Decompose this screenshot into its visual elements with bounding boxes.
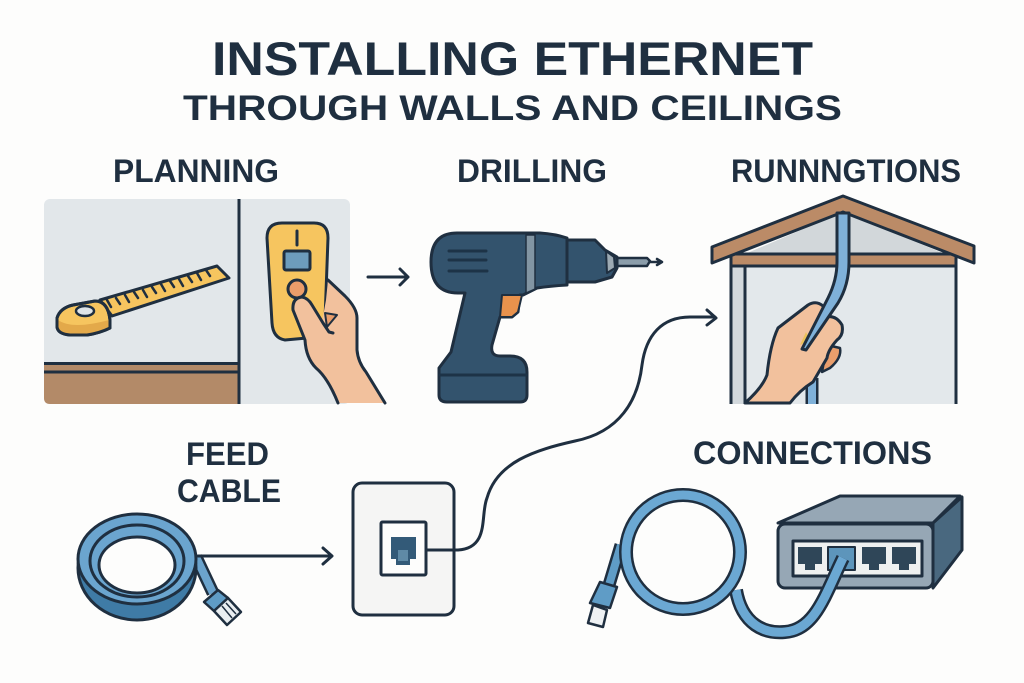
arrow: wall plate to running bbox=[426, 310, 716, 550]
cable tail to plug bbox=[609, 545, 621, 585]
heading: running: RUNNNGTIONS bbox=[731, 153, 961, 189]
arrow: planning to drilling bbox=[368, 269, 408, 285]
icon: stud finder bbox=[267, 223, 328, 340]
panel: planning bbox=[44, 199, 385, 404]
roof bbox=[712, 196, 974, 263]
icon: wall plate bbox=[353, 483, 454, 615]
icon: tape measure bbox=[57, 266, 229, 335]
icon: cable bbox=[806, 378, 818, 404]
heading: feed cable bbox=[177, 436, 281, 509]
icon: cable coil bbox=[78, 514, 241, 625]
icon: hand holding cable bbox=[745, 213, 849, 403]
panel: running cable bbox=[712, 196, 974, 404]
heading: planning: PLANNING bbox=[113, 153, 279, 189]
heading: feed cable: CABLE bbox=[177, 473, 281, 509]
heading: drilling: DRILLING bbox=[457, 153, 607, 189]
icon: drill bbox=[431, 233, 662, 402]
cable loop bbox=[626, 495, 740, 609]
ports bbox=[798, 547, 916, 570]
wall bbox=[731, 262, 956, 404]
icon: hand bbox=[293, 280, 385, 403]
icon: network switch bbox=[588, 495, 962, 632]
title: THROUGH WALLS AND CEILINGS bbox=[183, 89, 842, 128]
title: INSTALLING ETHERNET bbox=[212, 32, 813, 85]
title bbox=[183, 32, 842, 128]
arrow: coil to wall plate bbox=[198, 548, 332, 564]
heading: connections: CONNECTIONS bbox=[693, 435, 932, 471]
heading: feed cable: FEED bbox=[186, 436, 269, 472]
cable to switch bbox=[736, 558, 843, 632]
beam bbox=[731, 254, 956, 266]
attic gap bbox=[745, 212, 945, 254]
